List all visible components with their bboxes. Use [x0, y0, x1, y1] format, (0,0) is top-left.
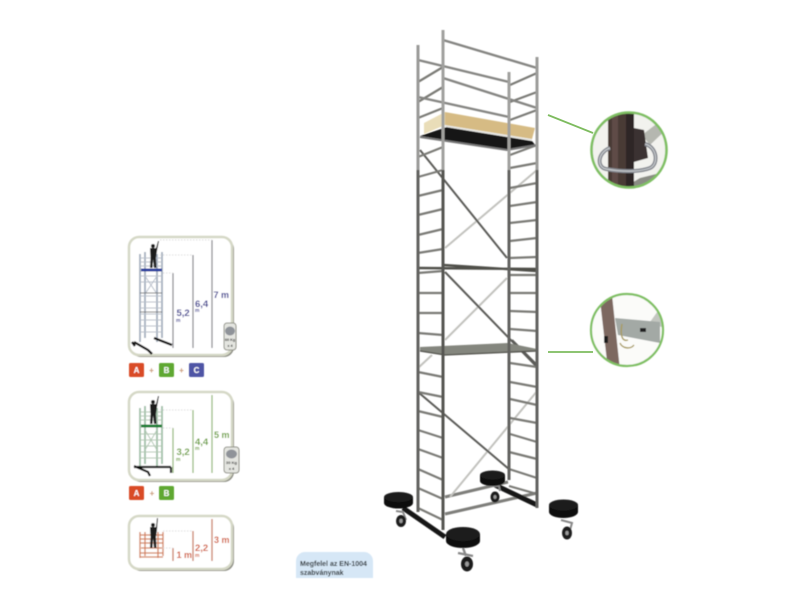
callout line bottom	[548, 351, 593, 353]
guard rails	[418, 40, 537, 117]
bottom base bars	[403, 482, 537, 537]
height arrows	[173, 519, 212, 561]
weight badge	[224, 447, 239, 473]
height labels: m	[176, 318, 181, 324]
height labels: 4,4	[195, 437, 209, 448]
card: 7 m configuration	[129, 237, 236, 357]
height labels: m	[195, 308, 200, 314]
weight badge: x 4	[229, 466, 235, 471]
weight badge: 60 Kg	[225, 338, 236, 342]
module badges A + B + C: C	[194, 366, 200, 375]
mini scaffold orange	[140, 532, 163, 558]
height labels: 1 m	[176, 550, 192, 560]
detail circle: pin on ladder frame	[591, 294, 668, 370]
main scaffold tower	[384, 30, 578, 572]
module badges A + B	[129, 486, 174, 500]
weight badge	[224, 323, 236, 350]
height labels: 3,2	[176, 447, 190, 458]
middle horizontal frame	[418, 265, 537, 271]
standard compliance note: Megfelel az EN-1004	[300, 561, 367, 568]
mini scaffold green	[134, 406, 171, 476]
module badges A + B: B	[164, 489, 170, 498]
module badges A + B + C: +	[149, 366, 154, 375]
caster wheel back	[480, 470, 505, 502]
height labels: 3 m	[214, 535, 230, 545]
module badges A + B + C: A	[134, 366, 140, 375]
worker silhouette	[150, 241, 159, 268]
height arrows	[173, 240, 212, 348]
height labels: m	[176, 457, 181, 463]
worker silhouette	[150, 518, 158, 548]
weight badge: 30 Kg	[226, 460, 237, 465]
lower deck platform	[420, 343, 537, 355]
module badges A + B + C	[129, 363, 204, 377]
module badges A + B + C: B	[164, 366, 170, 375]
standard compliance note: szabványnak	[300, 570, 344, 577]
ladder rungs right frame	[509, 73, 537, 494]
height arrows	[173, 395, 212, 473]
card: 5 m configuration	[129, 392, 239, 482]
height labels: m	[195, 553, 200, 559]
card: 3 m configuration	[129, 516, 234, 571]
height labels: 5 m	[214, 430, 230, 440]
detail circle: hook on post	[592, 110, 672, 192]
height labels: m	[195, 446, 200, 452]
frame posts	[418, 30, 537, 530]
height labels: 6,4	[195, 299, 209, 310]
caster wheel left	[384, 492, 413, 527]
diagonal braces	[418, 150, 538, 497]
height labels: 2,2	[195, 543, 208, 554]
module badges A + B + C: +	[179, 366, 184, 375]
callout line top	[548, 115, 593, 133]
height labels: 7 m	[214, 290, 229, 300]
standard compliance note	[296, 552, 374, 578]
worker silhouette	[150, 396, 159, 424]
upper deck with wooden board	[420, 112, 537, 150]
module badges A + B: +	[150, 489, 155, 498]
caster wheel front	[446, 527, 480, 572]
height labels	[176, 290, 229, 324]
module badges A + B: A	[134, 489, 140, 498]
height labels	[176, 535, 230, 560]
height labels	[176, 430, 230, 463]
caster wheel right	[549, 500, 578, 540]
ladder rungs left frame	[418, 67, 443, 520]
mini scaffold blue	[132, 252, 172, 354]
height labels: 5,2	[176, 308, 190, 319]
weight badge: x 4	[227, 344, 234, 348]
